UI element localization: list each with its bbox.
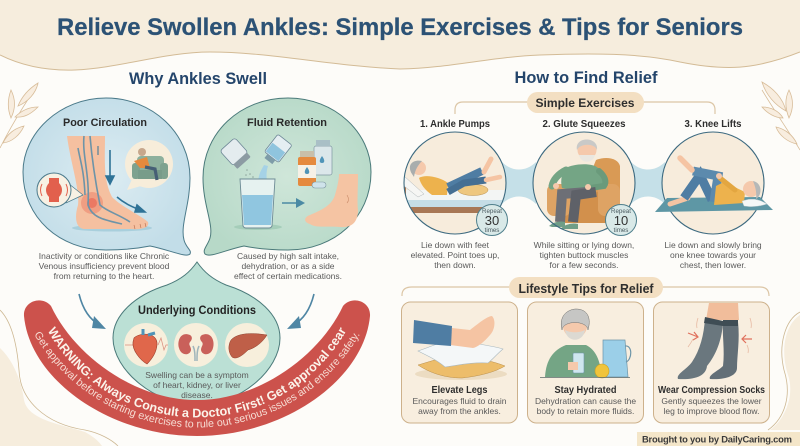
arrows: blood flow: [98, 146, 145, 212]
text: elevate legs: away from the ankles.: [418, 406, 501, 416]
description: underlying conditions: [145, 370, 249, 400]
connector ribbons between exercises: [502, 162, 665, 204]
text: compression socks: leg to improve blood flow.: [664, 406, 759, 416]
text: compression socks: Gently squeezes the lower: [661, 396, 762, 406]
description: fluid retention: effect of certain medications.: [234, 271, 342, 281]
icon: water glass: [234, 179, 282, 230]
icon: elevated leg on pillows: [413, 316, 507, 380]
description: glute squeezes: While sitting or lying down,: [534, 240, 634, 250]
description: ankle pumps: [411, 240, 499, 270]
badge: repeat 10 times: 10: [614, 213, 628, 228]
description: ankle pumps: elevated. Point toes up,: [411, 250, 499, 260]
icon: heart: [124, 323, 168, 367]
illustration: ankle pumps: [400, 132, 510, 234]
badge: repeat 10 times: [606, 204, 636, 236]
warning detail: Get approval before starting exercises to rule out serious issues and ensure safety.: [36, 332, 360, 428]
heading: fluid retention: Fluid Retention: [247, 117, 327, 129]
left section heading: Why Ankles Swell: [129, 69, 267, 88]
description: knee lifts: [664, 240, 762, 270]
icon: kidneys: [174, 323, 218, 367]
heading: underlying conditions: Underlying Conditions: [138, 303, 256, 317]
decorative corner blob: bottom left: [0, 310, 118, 446]
panel: underlying conditions: [113, 262, 280, 405]
heading: poor circulation: Poor Circulation: [63, 117, 147, 129]
heading: lifestyle tips: [402, 277, 769, 298]
description: underlying conditions: disease.: [181, 390, 213, 400]
illustration: swollen leg: [67, 136, 152, 232]
description: knee lifts: chest, then lower.: [680, 260, 746, 270]
description: ankle pumps: Lie down with feet: [421, 240, 490, 250]
footer credit: Brought to you by DailyCaring.com: [642, 434, 792, 444]
description: poor circulation: Venous insufficiency prevent blood: [39, 261, 170, 271]
leaf sprig right: [762, 82, 800, 150]
icon: compression socks: [678, 303, 752, 379]
icon: medicine bottles: [298, 140, 332, 188]
description: underlying conditions: Swelling can be a symptom: [145, 370, 249, 380]
icon: swollen foot: [305, 174, 358, 227]
heading: simple exercises: [455, 92, 715, 114]
description: underlying conditions: of heart, kidney, or liver: [153, 380, 241, 390]
text: elevate legs: Encourages fluid to drain: [412, 396, 507, 406]
exercise 2: glute squeezes: [533, 119, 636, 270]
text: stay hydrated: Stay Hydrated: [554, 385, 616, 396]
text: stay hydrated: Dehydration can cause the: [535, 396, 636, 406]
heading: knee lifts: 3. Knee Lifts: [684, 119, 742, 130]
badge: repeat 30 times: Repeat: [482, 208, 502, 215]
heading: lifestyle tips: Lifestyle Tips for Relief: [518, 281, 654, 296]
leaf sprig left: [0, 83, 38, 148]
arrow: to foot: [282, 198, 305, 208]
text: stay hydrated: [535, 385, 636, 416]
card: compression socks: [654, 302, 770, 423]
description: poor circulation: Inactivity or conditions like Chronic: [39, 251, 170, 261]
heading: simple exercises: Simple Exercises: [536, 96, 635, 110]
decorative corner blob: bottom right: [768, 312, 800, 430]
text: compression socks: [658, 385, 765, 416]
description: fluid retention: [234, 251, 342, 281]
illustration: glute squeezes: [533, 132, 635, 234]
exercise 3: knee lifts: [655, 119, 773, 270]
text: stay hydrated: body to retain more fluids.: [537, 406, 634, 416]
panel: fluid retention: [203, 98, 371, 255]
card: stay hydrated: [528, 302, 644, 423]
badge: repeat 30 times: 30: [485, 213, 499, 228]
badge: repeat 30 times: times: [485, 227, 499, 234]
description: fluid retention: dehydration, or as a side: [241, 261, 335, 271]
icon: salt shaker: [220, 138, 251, 170]
icon: person on sofa: [125, 140, 173, 190]
description: knee lifts: one knee towards your: [670, 250, 756, 260]
description: poor circulation: [39, 251, 170, 281]
heading: ankle pumps: 1. Ankle Pumps: [420, 119, 490, 130]
header band: [0, 0, 800, 70]
warning headline: WARNING: Always Consult a Doctor First! Get approval cear: [48, 326, 346, 418]
arrow: right to underlying conditions: [287, 294, 314, 329]
description: glute squeezes: for a few seconds.: [550, 260, 618, 270]
man: [561, 164, 604, 190]
text: elevate legs: Elevate Legs: [432, 385, 488, 396]
badge: repeat 30 times: [476, 204, 508, 236]
illustration: knee lifts: [655, 132, 773, 234]
description: poor circulation: from returning to the heart.: [54, 271, 154, 281]
text: compression socks: Wear Compression Socks: [658, 385, 765, 396]
description: fluid retention: Caused by high salt intake,: [237, 251, 339, 261]
icon: liver: [225, 323, 269, 367]
heading: glute squeezes: 2. Glute Squeezes: [542, 119, 626, 130]
description: glute squeezes: tighten buttock muscles: [540, 250, 628, 260]
description: ankle pumps: then down.: [434, 260, 476, 270]
panel: poor circulation: [23, 98, 190, 255]
badge: repeat 10 times: times: [614, 227, 628, 234]
text: elevate legs: [412, 385, 507, 416]
icon: pouring bottle: [258, 134, 292, 185]
card: elevate legs: [402, 302, 518, 423]
description: knee lifts: Lie down and slowly bring: [664, 240, 762, 250]
icon: inflamed vein magnifier: [37, 173, 83, 207]
badge: repeat 10 times: Repeat: [611, 208, 631, 215]
icon: man drinking water: [540, 309, 631, 378]
description: glute squeezes: [534, 240, 634, 270]
icon: salt grains: [245, 169, 254, 178]
armchair: [594, 158, 620, 192]
right section heading: How to Find Relief: [514, 68, 658, 87]
arrow: left to underlying conditions: [79, 294, 106, 329]
exercise 1: ankle pumps: [400, 119, 510, 270]
title: Relieve Swollen Ankles: Simple Exercises & Tips for Seniors: [57, 14, 743, 41]
warning banner: [24, 300, 370, 436]
